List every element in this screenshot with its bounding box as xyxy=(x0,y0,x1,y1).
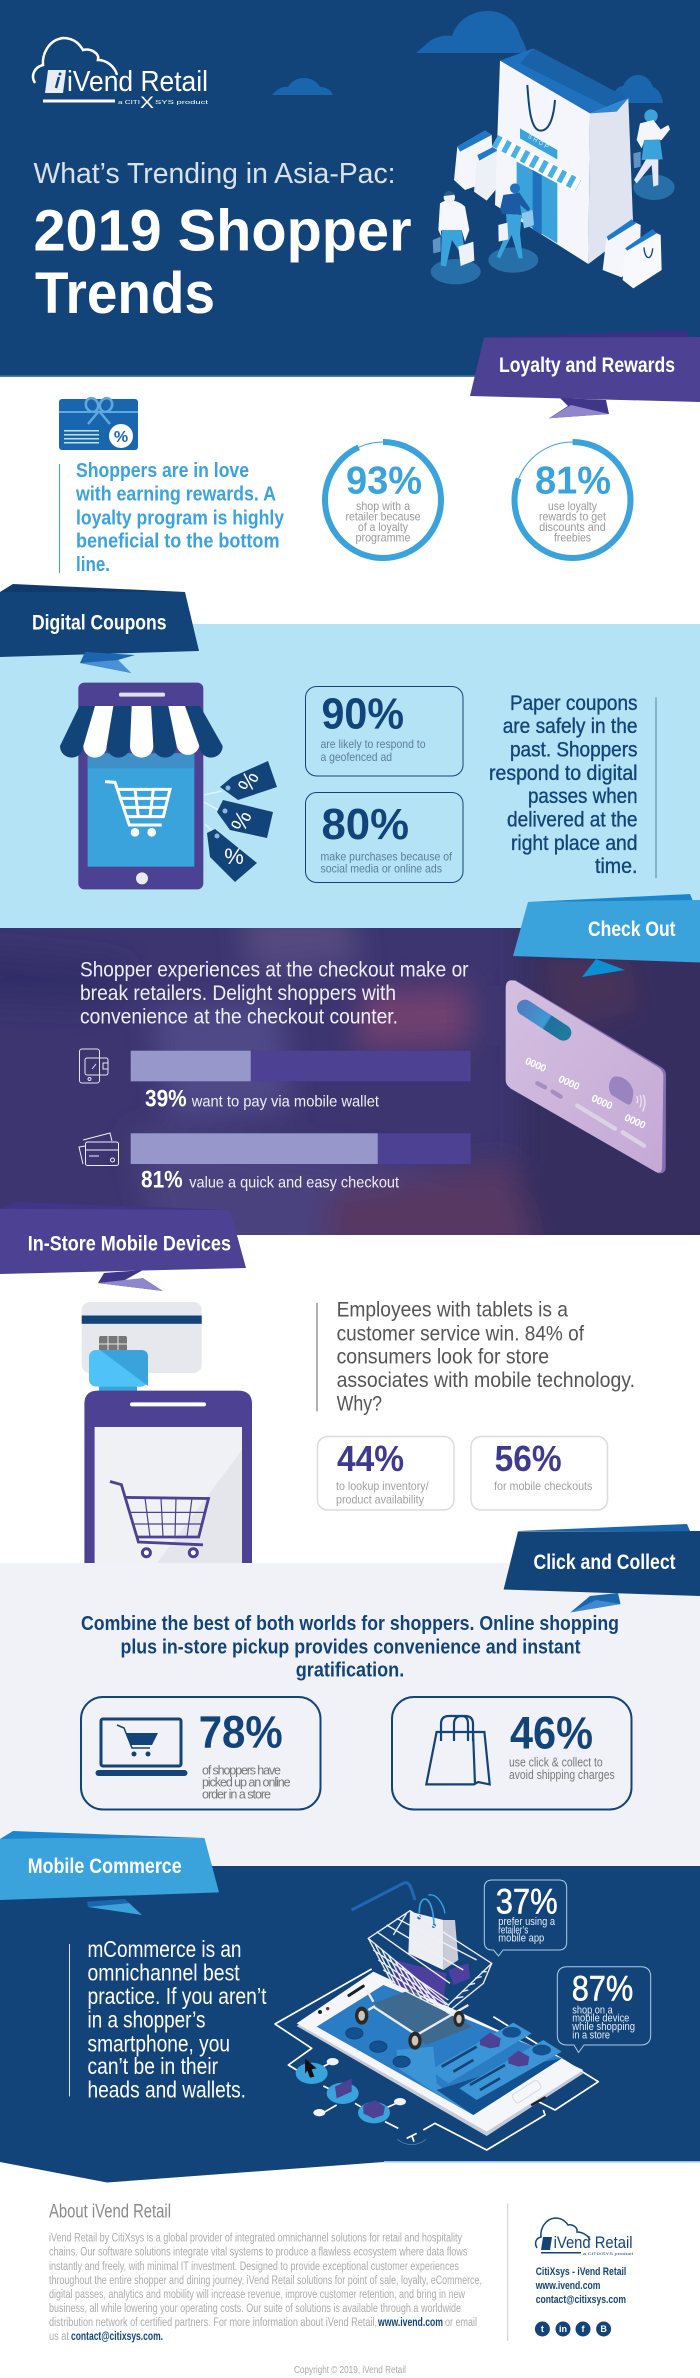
stat box: 56%: for mobile checkouts xyxy=(494,1479,592,1493)
stat ring: 93%: retailer because xyxy=(346,510,421,524)
stat ring: 81%: rewards to get xyxy=(539,510,607,524)
stat box: 46%: use click & collect to xyxy=(509,1756,603,1770)
icon: clouds xyxy=(272,11,663,103)
sub-element: shopping cart xyxy=(352,1883,492,2050)
logo: footer iVend Retail: iVend Retail xyxy=(554,2233,633,2252)
icon: social links: in xyxy=(559,2324,567,2334)
text block: employees with tablets: Employees with tablets is a xyxy=(337,1299,568,1322)
callout: 87%: shop on a xyxy=(572,2004,613,2016)
banner: Check Out xyxy=(513,894,700,977)
stat box: 78%: 78% xyxy=(199,1707,283,1758)
callout: 37%: retailer’s xyxy=(498,1924,529,1936)
icon: social links xyxy=(535,2322,611,2336)
panel: loyalty and rewards xyxy=(0,330,700,624)
figure: woman walking xyxy=(633,109,670,187)
figure: man with bags xyxy=(433,192,474,267)
stat box: 80% xyxy=(306,792,463,882)
panel: digital coupons xyxy=(0,584,700,928)
text block: employees with tablets: customer service win. 84% of xyxy=(337,1322,584,1345)
icon: social links: B xyxy=(600,2324,607,2334)
callout: 87%: mobile device xyxy=(572,2013,629,2025)
stat box: 44%: 44% xyxy=(337,1438,404,1479)
stat box: 90% xyxy=(306,686,463,776)
panel: in-store mobile devices xyxy=(0,1202,700,1563)
illustration: credit card: 0000 xyxy=(589,1093,614,1112)
text block: about paragraph: digital passes, analytics and mobility will increase revenue, improve customer retention, and bring in new xyxy=(49,2289,466,2301)
callout: 37%: prefer using a xyxy=(498,1916,556,1928)
text block: mCommerce: practice. If you aren’t xyxy=(88,1983,267,2009)
text block: employees with tablets: Why? xyxy=(337,1392,382,1415)
icon: gift card: % xyxy=(114,429,128,446)
banner: Mobile Commerce xyxy=(0,1831,219,1915)
text block: paper coupons: respond to digital xyxy=(489,762,638,785)
text block: about paragraph: distribution network of certified partners. For more information about iVend Retail, xyxy=(49,2317,377,2329)
heading: title: Trends xyxy=(35,261,215,326)
text block: paper coupons: are safely in the xyxy=(503,715,638,738)
bar chart: mobile wallet 39%: want to pay via mobile wallet xyxy=(191,1094,380,1111)
logo: iVend Retail: SYS product xyxy=(155,100,209,106)
text block: about paragraph: www.ivend.com xyxy=(377,2317,443,2329)
illustration: storefront phone xyxy=(60,683,223,889)
text block: mCommerce xyxy=(69,1936,267,2102)
logo: footer iVend Retail xyxy=(536,2218,634,2256)
stat ring: 81%: discounts and xyxy=(539,520,606,534)
text block: employees with tablets: associates with mobile technology. xyxy=(337,1369,635,1392)
stat ring: 93%: of a loyalty xyxy=(358,520,408,534)
text block: about paragraph: instantly and freely, with minimal IT investment. Designed to provide exceptional customer experiences xyxy=(49,2261,459,2273)
bar chart: mobile wallet 39% xyxy=(131,1051,471,1113)
illustration: credit card: 0000 xyxy=(622,1113,647,1132)
icon: discount tags: % xyxy=(233,767,264,796)
icon: credit cards xyxy=(79,1133,118,1166)
text block: paper coupons: Paper coupons xyxy=(510,692,638,715)
illustration: shopping bag store with shoppers xyxy=(431,48,675,288)
stat ring: 81%: use loyalty xyxy=(548,499,597,513)
banner: Click and Collect: Click and Collect xyxy=(534,1551,676,1574)
text block: about paragraph: contact@citixsys.com. xyxy=(71,2331,163,2343)
panel: check out xyxy=(0,894,700,1260)
text block: mCommerce: in a shopper’s xyxy=(88,2006,205,2032)
banner: Click and Collect xyxy=(504,1524,700,1612)
panel: hero header xyxy=(0,0,700,377)
logo: iVend Retail: a CITI xyxy=(118,100,141,106)
text block: about paragraph: throughout the entire shopper and dining journey, iVend Retail solutions for point of sale, loyalty, eCommerce, xyxy=(49,2275,482,2287)
stat box: 46% xyxy=(392,1697,632,1810)
banner: Digital Coupons xyxy=(0,584,199,673)
heading: title xyxy=(34,199,412,326)
bar chart: quick checkout 81% xyxy=(131,1133,471,1194)
icon: social links: f xyxy=(582,2324,586,2334)
stat box: 80%: make purchases because of xyxy=(320,850,453,864)
illustration: shopping bag store with shoppers: SHOP xyxy=(526,134,551,152)
text block: about paragraph: chains. Our software solutions integrate vital systems to produce a flawless ecosystem where data flows xyxy=(49,2247,468,2259)
text block: mCommerce: can’t be in their xyxy=(88,2053,218,2079)
logo: iVend Retail xyxy=(33,38,209,112)
callout: 87%: in a store xyxy=(572,2029,610,2041)
text block: checkout intro: Shopper experiences at the checkout make or xyxy=(80,959,469,982)
stat ring: 81% xyxy=(514,442,630,558)
panel: click and collect xyxy=(0,1524,700,1866)
text block: loyalty intro: line. xyxy=(76,554,110,576)
stat ring: 93% xyxy=(325,442,441,558)
banner: Mobile Commerce: Mobile Commerce xyxy=(28,1855,182,1878)
text block: mCommerce: mCommerce is an xyxy=(88,1936,242,1962)
text block: paper coupons: time. xyxy=(595,855,638,878)
stat box: 44% xyxy=(318,1436,454,1510)
text block: paper coupons xyxy=(489,692,656,878)
text block: about paragraph: us at xyxy=(49,2331,70,2343)
callout: 37%: 37% xyxy=(496,1882,558,1921)
text block: paper coupons: delivered at the xyxy=(507,808,638,832)
text: copyright: Copyright © 2019, iVend Retail xyxy=(294,2364,406,2376)
stat box: 46%: 46% xyxy=(510,1707,593,1758)
stat box: 78% xyxy=(81,1697,320,1810)
text block: loyalty intro xyxy=(59,460,285,576)
text block: combine best of both worlds xyxy=(81,1613,619,1682)
bar chart: quick checkout 81%: 81% xyxy=(141,1167,183,1194)
icon: mobile wallet xyxy=(80,1049,108,1083)
stat box: 90%: are likely to respond to xyxy=(320,737,426,751)
text block: paper coupons: past. Shoppers xyxy=(510,738,638,762)
text block: loyalty intro: loyalty program is highly xyxy=(76,507,285,529)
text block: checkout intro xyxy=(80,959,469,1028)
stat box: 80%: social media or online ads xyxy=(320,862,442,876)
text block: loyalty intro: Shoppers are in love xyxy=(76,460,249,482)
illustration: credit card: 0000 xyxy=(556,1074,581,1093)
stat box: 56% xyxy=(471,1436,608,1510)
stat ring: 81%: 81% xyxy=(535,460,611,503)
text block: loyalty intro: beneficial to the bottom xyxy=(76,531,280,553)
text block: mCommerce: smartphone, you xyxy=(88,2030,230,2056)
icon: discount tags xyxy=(204,761,277,882)
icon: shopping bag xyxy=(426,1716,490,1784)
illustration: phone with shopping cart xyxy=(275,1883,598,2150)
stat box: 44%: to lookup inventory/ xyxy=(336,1479,429,1493)
text block: contact details: www.ivend.com xyxy=(535,2280,601,2292)
banner: Check Out: Check Out xyxy=(588,918,676,941)
callout: 37%: mobile app xyxy=(498,1932,544,1944)
text block: about paragraph: iVend Retail by CitiXsys is a global provider of integrated omnichannel solutions for retail and hospitality xyxy=(49,2233,462,2245)
text block: combine best of both worlds: gratification. xyxy=(296,1660,404,1682)
banner: In-Store Mobile Devices xyxy=(0,1202,246,1291)
text block: checkout intro: break retailers. Delight shoppers with xyxy=(80,982,396,1005)
icon: laptop with cart xyxy=(96,1719,188,1776)
stat box: 90%: a geofenced ad xyxy=(320,750,392,764)
text block: employees with tablets xyxy=(316,1299,635,1415)
stat box: 78%: of shoppers have xyxy=(202,1764,281,1778)
banner: Loyalty and Rewards xyxy=(470,330,700,418)
icon: discount tags: % xyxy=(226,807,257,835)
callout: 87%: while shopping xyxy=(571,2021,635,2033)
stat box: 80%: 80% xyxy=(322,800,409,849)
stat box: 46%: avoid shipping charges xyxy=(509,1768,615,1782)
sub-element: app cards xyxy=(430,2023,562,2100)
illustration: credit card xyxy=(506,980,666,1173)
callout: 87% xyxy=(557,1967,651,2052)
text block: combine best of both worlds: plus in-store pickup provides convenience and instant xyxy=(120,1636,581,1658)
logo: footer iVend Retail: a CITIXSYS product xyxy=(583,2251,634,2256)
illustration: credit card: 0000 xyxy=(523,1056,548,1075)
text block: mCommerce: heads and wallets. xyxy=(88,2076,246,2102)
logo: iVend Retail: X xyxy=(140,93,154,112)
figure: woman with bags xyxy=(497,183,534,258)
stat ring: 93%: programme xyxy=(356,530,411,544)
text block: mCommerce: omnichannel best xyxy=(88,1959,240,1985)
stat ring: 81%: freebies xyxy=(554,530,591,544)
sub-element: connected nodes xyxy=(296,2058,426,2145)
text block: paper coupons: right place and xyxy=(511,832,638,855)
text block: about paragraph xyxy=(49,2233,482,2343)
text block: checkout intro: convenience at the checkout counter. xyxy=(80,1006,398,1028)
text block: loyalty intro: with earning rewards. A xyxy=(75,484,276,506)
text block: contact details: CitiXsys - iVend Retail xyxy=(536,2266,626,2278)
stat box: 44%: product availability xyxy=(336,1493,424,1507)
text block: employees with tablets: consumers look for store xyxy=(337,1346,549,1369)
heading: about: About iVend Retail xyxy=(49,2202,171,2223)
stat ring: 93%: 93% xyxy=(346,460,422,503)
text block: contact details: contact@citixsys.com xyxy=(536,2294,626,2306)
callout: 87%: 87% xyxy=(572,1970,633,2009)
text block: about paragraph: business, all while lowering your operating costs. Our suite of solutions is available through a worldwide xyxy=(49,2303,461,2315)
bar chart: mobile wallet 39%: 39% xyxy=(145,1086,187,1113)
background photo xyxy=(0,928,700,1235)
logo: iVend Retail: iVend Retail xyxy=(67,66,208,98)
banner: Digital Coupons: Digital Coupons xyxy=(32,612,166,634)
text block: about paragraph: or email xyxy=(445,2317,477,2329)
heading: subtitle: What’s Trending in Asia-Pac: xyxy=(34,158,396,190)
icon: gift card xyxy=(59,396,138,450)
icon: discount tags: % xyxy=(224,844,244,869)
bar chart: quick checkout 81%: value a quick and easy checkout xyxy=(189,1175,399,1192)
icon: social links: t xyxy=(541,2324,544,2334)
stat box: 78%: picked up an online xyxy=(202,1775,291,1789)
text block: contact details xyxy=(535,2266,626,2306)
stat box: 56%: 56% xyxy=(495,1438,562,1479)
stat box: 90%: 90% xyxy=(322,689,404,738)
stat ring: 93%: shop with a xyxy=(356,499,410,513)
stat box: 78%: order in a store xyxy=(202,1788,271,1802)
text block: paper coupons: passes when xyxy=(528,785,638,808)
banner: In-Store Mobile Devices: In-Store Mobile Devices xyxy=(28,1233,231,1256)
text block: combine best of both worlds: Combine the best of both worlds for shoppers. Online shopping xyxy=(81,1613,619,1635)
callout: 37% xyxy=(484,1880,567,1956)
heading: title: 2019 Shopper xyxy=(34,199,412,264)
illustration: card and phone with cart xyxy=(82,1302,252,1563)
panel: mobile commerce xyxy=(0,1831,700,2182)
panel: footer xyxy=(49,2202,634,2376)
